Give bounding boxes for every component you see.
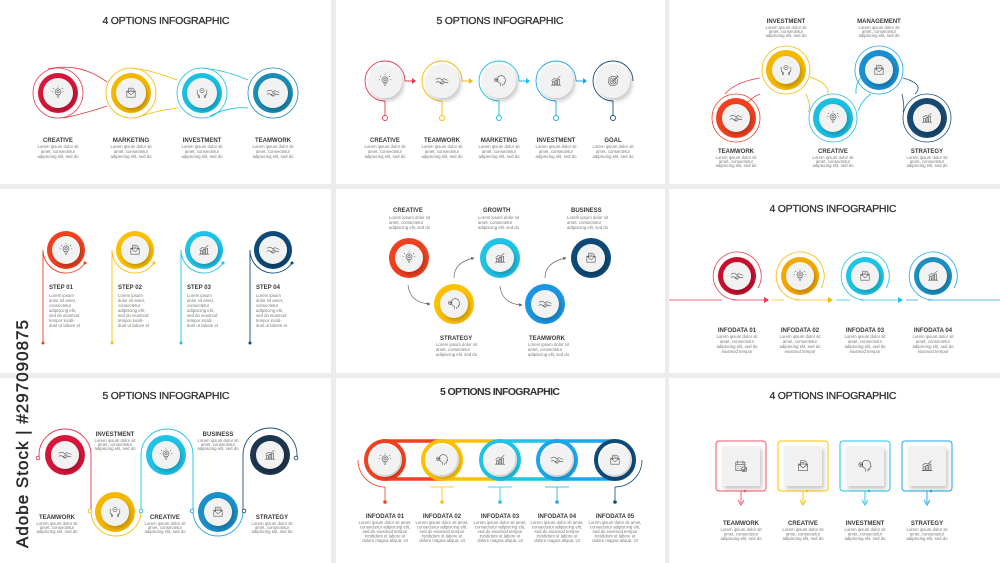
panel: 4 options squares — [669, 378, 1000, 563]
step 01: Lorem ipsum — [49, 293, 74, 298]
title: 5 OPTIONS INFOGRAPHIC — [102, 390, 230, 402]
step 04: consectetur — [256, 303, 279, 308]
option: creative: amet, consectetur — [148, 525, 183, 530]
option: growth — [478, 208, 520, 278]
option: investment — [840, 441, 890, 541]
option: investment: INVESTMENT — [183, 138, 222, 144]
option: investment: Lorem ipsum dolor sit — [181, 144, 223, 149]
option: teamwork: amet, consectetur — [528, 347, 563, 352]
option: infodata 01: sed do eiusmod tempor — [363, 529, 408, 534]
title: 4 OPTIONS INFOGRAPHIC — [102, 15, 230, 27]
option: infodata 04: INFODATA 04 — [538, 514, 577, 520]
option: creative: adipiscing elit, sed do — [812, 163, 854, 168]
option: investment — [762, 19, 810, 94]
option: management — [855, 19, 903, 94]
option: teamwork: Lorem ipsum dolor sit — [36, 521, 78, 526]
option: creative: amet, consectetur — [368, 149, 403, 154]
option: infodata 04: consectetur adipiscing elit, — [532, 524, 582, 530]
option: teamwork: TEAMWORK — [723, 521, 760, 527]
option: infodata 01: INFODATA 01 — [366, 514, 405, 520]
option: infodata 02: INFODATA 02 — [781, 328, 820, 334]
option: management: Lorem ipsum dolor sit — [858, 25, 900, 30]
option: infodata 01: consectetur adipiscing elit, — [360, 524, 410, 530]
option: infodata 04: amet, consectetur — [916, 339, 951, 344]
step 01: STEP 01 — [49, 285, 74, 291]
step 03: adipiscing elit, — [187, 308, 214, 313]
option: strategy — [903, 94, 951, 168]
option: teamwork — [421, 61, 473, 159]
step 02: dolor sit amet, — [118, 298, 145, 303]
option: goal: amet, consectetur — [596, 149, 631, 154]
option: strategy: amet, consectetur — [436, 347, 471, 352]
option: infodata 03 — [841, 252, 889, 354]
option: creative: adipiscing elit, sed do — [364, 154, 406, 159]
step 02: sed do eiusmod — [118, 313, 149, 318]
option: infodata 02: sed do eiusmod tempor — [420, 529, 465, 534]
step 04: Lorem ipsum — [256, 293, 281, 298]
option: teamwork: Lorem ipsum dolor sit — [528, 342, 570, 347]
option: management: amet, consectetur — [862, 29, 897, 34]
option: teamwork: TEAMWORK — [529, 336, 566, 342]
option: teamwork: amet, consectetur — [256, 149, 291, 154]
option: marketing: amet, consectetur — [114, 149, 149, 154]
option: teamwork: TEAMWORK — [255, 138, 292, 144]
option: infodata 05: sed do eiusmod tempor — [593, 529, 638, 534]
option: strategy: amet, consectetur — [255, 525, 290, 530]
option: infodata 04: sed do eiusmod tempor — [535, 529, 580, 534]
option: infodata 03: Lorem ipsum dolor sit amet, — [473, 520, 527, 525]
option: business: amet, consectetur — [201, 442, 236, 447]
step 03 — [180, 231, 224, 344]
option: creative: Lorem ipsum dolor sit — [812, 155, 854, 160]
option: investment: adipiscing elit, sed do — [535, 154, 577, 159]
option: strategy — [902, 441, 952, 541]
option: creative: Lorem ipsum dolor sit — [389, 215, 431, 220]
option: investment: adipiscing elit, sed do — [765, 33, 807, 38]
option: teamwork: amet, consectetur — [40, 525, 75, 530]
option: growth: amet, consectetur — [478, 220, 513, 225]
option: infodata 02: incididunt ut labore et — [422, 534, 463, 538]
step 03: STEP 03 — [187, 285, 212, 291]
option: infodata 05 — [588, 441, 642, 543]
option: infodata 03: Lorem ipsum dolor sit — [844, 334, 886, 339]
option: marketing — [478, 61, 530, 159]
option: investment: amet, consectetur — [769, 29, 804, 34]
connectors — [48, 67, 248, 118]
option: strategy: STRATEGY — [911, 521, 943, 527]
panel: 5 options zigzag — [669, 0, 1000, 184]
title: 4 OPTIONS INFOGRAPHIC — [770, 390, 897, 402]
option: infodata 02: eiusmod tempor — [785, 349, 816, 354]
step 03: dolor sit amet, — [187, 298, 214, 303]
option: infodata 02: dolore magna aliqua. Ut — [419, 538, 466, 543]
option: infodata 03: consectetur adipiscing elit, — [475, 524, 525, 530]
option: growth: adipiscing elit, sed do — [478, 225, 520, 230]
option: infodata 02: Lorem ipsum dolor sit — [779, 334, 821, 339]
option: teamwork: Lorem ipsum dolor sit — [720, 527, 762, 532]
option: investment — [535, 61, 587, 159]
option: creative: amet, consectetur — [786, 532, 821, 536]
option: business: BUSINESS — [203, 432, 233, 438]
step 01: adipiscing elit, — [49, 308, 76, 313]
option: creative: adipiscing elit, sed do — [782, 536, 824, 541]
option: marketing: amet, consectetur — [482, 149, 517, 154]
option: creative: CREATIVE — [370, 138, 400, 144]
option: investment: amet, consectetur — [539, 149, 574, 154]
option: infodata 04: dolore magna aliqua. Ut — [534, 538, 581, 543]
option: infodata 01: incididunt ut labore et — [365, 534, 406, 538]
option: creative: adipiscing elit, sed do — [37, 154, 79, 159]
step 02: dunt ut labore et — [118, 323, 150, 328]
option: teamwork: adipiscing elit, sed do — [252, 154, 294, 159]
option: infodata 03: adipiscing elit, sed do — [844, 344, 886, 349]
option: goal: adipiscing elit, sed do — [592, 154, 634, 159]
step 03: consectetur — [187, 303, 210, 308]
option: infodata 03 — [473, 441, 527, 543]
option: infodata 04: Lorem ipsum dolor sit — [912, 334, 954, 339]
step 03: tempor incidi- — [187, 318, 213, 323]
step 04: adipiscing elit, — [256, 308, 283, 313]
step 03: Lorem ipsum — [187, 293, 212, 298]
option: infodata 01: adipiscing elit, sed do — [716, 344, 758, 349]
option: creative: CREATIVE — [818, 149, 848, 155]
step 02: consectetur — [118, 303, 141, 308]
option: teamwork: TEAMWORK — [424, 138, 461, 144]
option: creative: CREATIVE — [43, 138, 73, 144]
option: infodata 03: INFODATA 03 — [846, 328, 885, 334]
option: marketing: Lorem ipsum dolor sit — [478, 144, 520, 149]
option: infodata 04: Lorem ipsum dolor sit amet, — [530, 520, 584, 525]
panel: 5 options snake — [0, 378, 331, 563]
panel: 4 options timeline — [669, 189, 1000, 373]
step 03: sed do eiusmod — [187, 313, 218, 318]
option: investment: INVESTMENT — [767, 19, 806, 25]
option: infodata 02: Lorem ipsum dolor sit amet, — [415, 520, 469, 525]
option: infodata 04 — [909, 252, 957, 354]
title: 5 OPTIONS INFOGRAPHIC — [436, 15, 564, 27]
step 04: dunt ut labore et — [256, 323, 288, 328]
watermark: vertical stock id: Adobe Stock | #297090875 — [13, 320, 32, 548]
step 01: consectetur — [49, 303, 72, 308]
option: marketing: adipiscing elit, sed do — [478, 154, 520, 159]
option: strategy: STRATEGY — [440, 336, 472, 342]
option: infodata 02: amet, consectetur — [783, 339, 818, 344]
option: strategy: Lorem ipsum dolor sit — [906, 527, 948, 532]
option: business: BUSINESS — [571, 208, 602, 214]
step 02: adipiscing elit, — [118, 308, 145, 313]
panel: 5 options arrows — [336, 0, 665, 184]
option: business: Lorem ipsum dolor sit — [567, 215, 609, 220]
option: management: MANAGEMENT — [857, 19, 901, 25]
option: teamwork: Lorem ipsum dolor sit — [252, 144, 294, 149]
option: creative — [33, 68, 83, 159]
option: teamwork — [716, 441, 766, 541]
option: strategy: amet, consectetur — [910, 159, 945, 164]
option: teamwork: adipiscing elit, sed do — [36, 529, 78, 534]
option: infodata 03: sed do eiusmod tempor — [478, 529, 523, 534]
panel: 4 options circles wave — [0, 0, 331, 184]
option: strategy: adipiscing elit, sed do — [906, 536, 948, 541]
option: marketing — [106, 68, 156, 159]
option: creative: CREATIVE — [150, 515, 180, 521]
step 01: dunt ut labore et — [49, 323, 81, 328]
option: strategy: STRATEGY — [256, 515, 288, 521]
option: marketing: adipiscing elit, sed do — [110, 154, 152, 159]
option: infodata 04: adipiscing elit, sed do — [912, 344, 954, 349]
option: growth: Lorem ipsum dolor sit — [478, 215, 520, 220]
arrows — [408, 258, 566, 305]
step 04: tempor incidi- — [256, 318, 282, 323]
option: goal — [592, 61, 634, 159]
step 02: STEP 02 — [118, 285, 143, 291]
option: investment: INVESTMENT — [96, 432, 135, 438]
option: creative: Lorem ipsum dolor sit — [364, 144, 406, 149]
step 04: sed do eiusmod — [256, 313, 287, 318]
option: creative: amet, consectetur — [816, 159, 851, 164]
option: infodata 01 — [713, 252, 761, 354]
option: investment: adipiscing elit, sed do — [181, 154, 223, 159]
step 01: tempor incidi- — [49, 318, 75, 323]
panel: steps — [0, 189, 331, 373]
option: infodata 05: incididunt ut labore et — [595, 534, 636, 538]
option: infodata 03: amet, consectetur — [848, 339, 883, 344]
step 04 — [248, 231, 294, 344]
option: investment: Lorem ipsum dolor sit — [94, 438, 136, 443]
option: infodata 02: INFODATA 02 — [423, 514, 462, 520]
option: investment: Lorem ipsum dolor sit — [765, 25, 807, 30]
option: creative — [809, 94, 857, 168]
option: creative: Lorem ipsum dolor sit — [782, 527, 824, 532]
option: infodata 02 — [415, 441, 469, 543]
option: teamwork: adipiscing elit, sed do — [421, 154, 463, 159]
option: business: adipiscing elit, sed do — [567, 225, 609, 230]
option: creative — [389, 208, 431, 278]
option: investment: adipiscing elit, sed do — [844, 536, 886, 541]
option: creative: amet, consectetur — [389, 220, 424, 225]
option: teamwork: adipiscing elit, sed do — [528, 352, 570, 357]
option: investment: amet, consectetur — [185, 149, 220, 154]
step 03: dunt ut labore et — [187, 323, 219, 328]
option: business: adipiscing elit, sed do — [197, 446, 239, 451]
option: investment: amet, consectetur — [848, 532, 883, 536]
option: marketing: MARKETING — [113, 138, 149, 144]
connectors — [725, 74, 918, 112]
option: growth: GROWTH — [483, 208, 510, 214]
option: business — [567, 208, 611, 278]
option: infodata 04: eiusmod tempor — [918, 349, 949, 354]
option: creative: Lorem ipsum dolor sit — [37, 144, 79, 149]
option: teamwork: amet, consectetur — [425, 149, 460, 154]
option: strategy — [434, 284, 478, 357]
option: investment: Lorem ipsum dolor sit — [844, 527, 886, 532]
option: infodata 01: INFODATA 01 — [718, 328, 757, 334]
option: strategy: Lorem ipsum dolor sit — [906, 155, 948, 160]
step 04: STEP 04 — [256, 285, 281, 291]
option: creative: adipiscing elit, sed do — [389, 225, 431, 230]
option: teamwork — [36, 435, 85, 534]
option: infodata 04 — [530, 441, 584, 543]
option: strategy: adipiscing elit, sed do — [906, 163, 948, 168]
option: creative — [364, 61, 416, 159]
step 04: dolor sit amet, — [256, 298, 283, 303]
option: teamwork: amet, consectetur — [724, 532, 759, 536]
option: infodata 03: dolore magna aliqua. Ut — [477, 538, 524, 543]
option: teamwork: adipiscing elit, sed do — [720, 536, 762, 541]
option: business: Lorem ipsum dolor sit — [197, 438, 239, 443]
option: infodata 01: eiusmod tempor — [722, 349, 753, 354]
option: business: amet, consectetur — [567, 220, 602, 225]
option: infodata 01: Lorem ipsum dolor sit amet, — [358, 520, 412, 525]
option: teamwork: Lorem ipsum dolor sit — [715, 155, 757, 160]
option: teamwork: Lorem ipsum dolor sit — [421, 144, 463, 149]
option: infodata 05: dolore magna aliqua. Ut — [592, 538, 639, 543]
option: teamwork: amet, consectetur — [719, 159, 754, 164]
option: investment: amet, consectetur — [98, 442, 133, 447]
option: infodata 01: Lorem ipsum dolor sit — [716, 334, 758, 339]
band segments — [385, 441, 615, 479]
option: creative: CREATIVE — [788, 521, 818, 527]
option: infodata 02: consectetur adipiscing elit, — [417, 524, 467, 530]
step 01 — [42, 231, 86, 344]
snake path — [39, 428, 297, 536]
option: creative: adipiscing elit, sed do — [144, 529, 186, 534]
panel: 5 options band — [336, 378, 665, 563]
option: investment — [177, 68, 227, 159]
option: creative — [144, 435, 186, 534]
option: strategy: adipiscing elit, sed do — [251, 529, 293, 534]
option: management: adipiscing elit, sed do — [858, 33, 900, 38]
option: investment: adipiscing elit, sed do — [94, 446, 136, 451]
title: 5 OPTIONS INFOGRAPHIC — [440, 386, 560, 398]
option: investment: INVESTMENT — [846, 521, 885, 527]
step 02: tempor incidi- — [118, 318, 144, 323]
option: goal: GOAL — [604, 138, 622, 144]
option: strategy — [250, 435, 293, 534]
step 02 — [110, 231, 156, 344]
option: teamwork: TEAMWORK — [718, 149, 755, 155]
option: infodata 05: INFODATA 05 — [596, 514, 635, 520]
step 01: dolor sit amet, — [49, 298, 76, 303]
option: infodata 02: adipiscing elit, sed do — [779, 344, 821, 349]
option: investment: Lorem ipsum dolor sit — [535, 144, 577, 149]
title: 4 OPTIONS INFOGRAPHIC — [770, 203, 897, 215]
option: teamwork: TEAMWORK — [39, 515, 76, 521]
option: strategy: adipiscing elit, sed do — [436, 352, 478, 357]
option: teamwork: adipiscing elit, sed do — [715, 163, 757, 168]
option: infodata 03: INFODATA 03 — [481, 514, 520, 520]
option: teamwork — [248, 68, 298, 159]
option: marketing: Lorem ipsum dolor sit — [110, 144, 152, 149]
option: investment: INVESTMENT — [537, 138, 576, 144]
option: infodata 03: eiusmod tempor — [850, 349, 881, 354]
option: strategy: Lorem ipsum dolor sit — [436, 342, 478, 347]
option: creative: CREATIVE — [393, 208, 423, 214]
option: infodata 05: Lorem ipsum dolor sit amet, — [588, 520, 642, 525]
timeline line — [669, 297, 1000, 303]
option: strategy: Lorem ipsum dolor sit — [251, 521, 293, 526]
option: infodata 01: amet, consectetur — [720, 339, 755, 344]
step 01: sed do eiusmod — [49, 313, 80, 318]
option: infodata 01: dolore magna aliqua. Ut — [362, 538, 409, 543]
option: creative — [778, 441, 828, 541]
option: infodata 01 — [358, 441, 412, 543]
option: infodata 04: incididunt ut labore et — [537, 534, 578, 538]
option: business — [197, 432, 239, 532]
option: infodata 02 — [776, 252, 824, 354]
step 02: Lorem ipsum — [118, 293, 143, 298]
option: investment — [94, 432, 136, 532]
option: teamwork — [712, 94, 760, 168]
panel: flow with curved arrows — [336, 189, 665, 373]
option: strategy: STRATEGY — [911, 149, 943, 155]
option: strategy: amet, consectetur — [910, 532, 945, 536]
option: goal: Lorem ipsum dolor sit — [592, 144, 634, 149]
option: creative: Lorem ipsum dolor sit — [144, 521, 186, 526]
option: infodata 05: consectetur adipiscing elit, — [590, 524, 640, 530]
option: creative: amet, consectetur — [41, 149, 76, 154]
option: infodata 03: incididunt ut labore et — [480, 534, 521, 538]
option: marketing: MARKETING — [481, 138, 517, 144]
option: infodata 04: INFODATA 04 — [914, 328, 953, 334]
option: teamwork — [525, 284, 570, 357]
